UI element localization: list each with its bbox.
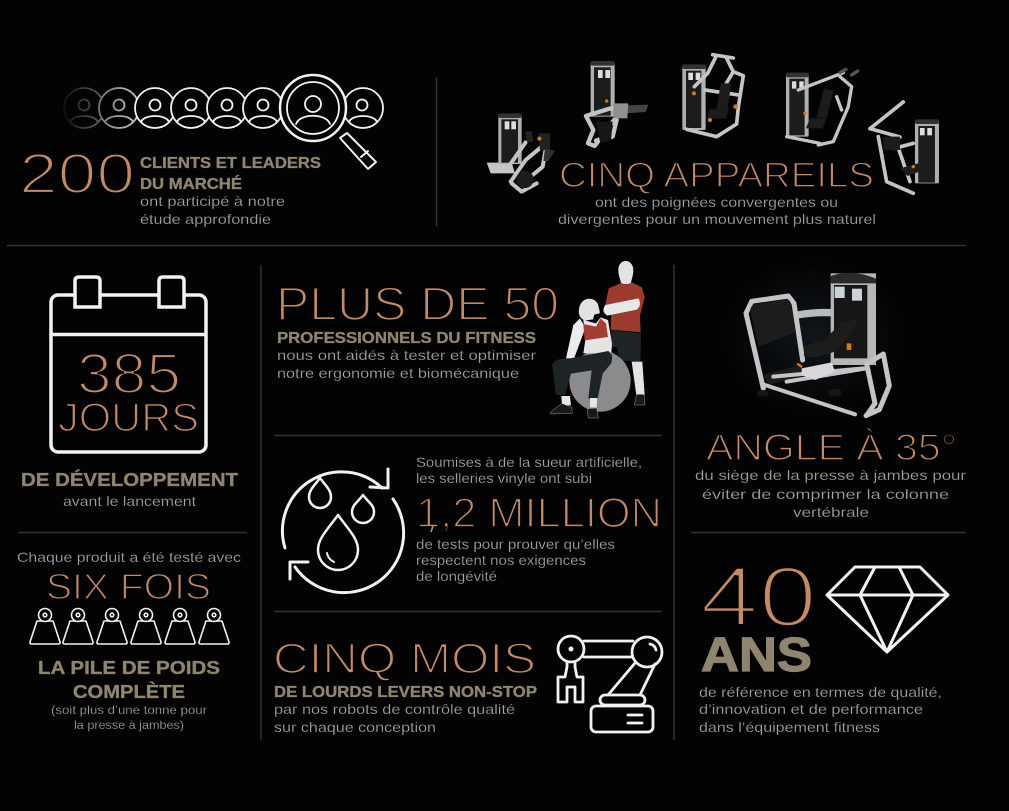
- machine 2: [586, 61, 648, 146]
- text: de tests: de tests pour prouver qu’elles: [416, 536, 615, 552]
- icon: calendar: [51, 277, 206, 452]
- text: soit plus: (soit plus d’une tonne pour: [51, 703, 207, 717]
- heading: six fois: SIX FOIS: [46, 566, 211, 607]
- panel: 385 jours: [21, 277, 239, 509]
- heading: 200: 200: [19, 142, 135, 206]
- text: longévité: de longévité: [416, 568, 497, 584]
- text: siège line 1: du siège de la presse à jambes pour: [695, 467, 966, 483]
- text: professionnels: PROFESSIONNELS DU FITNESS: [277, 330, 536, 347]
- text: respectent: respectent nos exigences: [416, 552, 586, 568]
- image: five machines: [487, 55, 939, 193]
- ball: [569, 350, 631, 412]
- text: soumises: Soumises à de la sueur artificielle,: [416, 454, 642, 470]
- text: sur chaque: sur chaque conception: [274, 719, 436, 735]
- machine 1: [487, 113, 555, 192]
- image: leg press machine: [723, 260, 903, 416]
- text: lourds levers: DE LOURDS LEVERS NON-STOP: [274, 684, 537, 701]
- machine 5: [870, 102, 939, 193]
- woman: [550, 299, 612, 418]
- text: ont participé: ont participé à notre: [140, 193, 285, 209]
- heading: cinq mois: CINQ MOIS: [273, 635, 536, 683]
- panel: cinq appareils: [487, 55, 939, 227]
- heading: jours: JOURS: [58, 396, 199, 440]
- text: poignées line 2: divergentes pour un mouvement plus naturel: [558, 211, 876, 227]
- text: de développement: DE DÉVELOPPEMENT: [21, 469, 239, 490]
- heading: 385: 385: [77, 342, 181, 406]
- heading: ans: ANS: [701, 629, 812, 682]
- image: two athletes with ball: [550, 261, 645, 418]
- text: par nos robots: par nos robots de contrôle qualité: [274, 701, 515, 717]
- panel: 40 ans: [699, 550, 948, 735]
- panel: angle 35: [695, 260, 966, 520]
- text: du marché: DU MARCHÉ: [140, 176, 242, 193]
- panel: cinq mois: [273, 635, 662, 735]
- text: siège line 3: vertébrale: [793, 504, 869, 520]
- icon: robot arm: [558, 636, 662, 732]
- icon: row of client avatars with magnifier: [64, 75, 383, 169]
- heading: angle à 35°: ANGLE À 35°: [706, 427, 957, 468]
- text: nous ont aidés: nous ont aidés à tester et optimiser: [277, 347, 536, 363]
- text: notre ergonomie: notre ergonomie et biomécanique: [277, 365, 519, 381]
- text: complète: COMPLÈTE: [73, 681, 185, 702]
- text: clients et leaders: CLIENTS ET LEADERS: [140, 155, 321, 172]
- text: étude approfondie: étude approfondie: [140, 211, 271, 227]
- panel: six fois: [17, 549, 241, 732]
- icon: diamond: [827, 567, 948, 652]
- panel: 200 clients: [19, 75, 383, 227]
- text: chaque produit: Chaque produit a été testé avec: [17, 549, 241, 565]
- icon: recycling arrows and sweat drops: [282, 469, 404, 593]
- text: avant le lancement: avant le lancement: [63, 493, 196, 509]
- panel: plus de 50: [276, 261, 645, 418]
- text: référence: de référence en termes de qualité,: [699, 684, 942, 700]
- icon: six weights: [30, 608, 229, 644]
- man: [603, 261, 645, 405]
- text: selleries: les selleries vinyle ont subi: [416, 470, 592, 486]
- machine 4: [786, 69, 858, 145]
- heading: cinq appareils: CINQ APPAREILS: [559, 156, 874, 195]
- heading: 40: 40: [700, 550, 817, 645]
- text: équipement: dans l’équipement fitness: [699, 719, 880, 735]
- heading: 1,2 million: 1,2 MILLION: [416, 489, 662, 536]
- heading: plus de 50: PLUS DE 50: [276, 277, 559, 330]
- machine 3: [682, 55, 743, 137]
- text: la pile de poids: LA PILE DE POIDS: [38, 657, 220, 678]
- text: innovation: d’innovation et de performance: [699, 701, 923, 717]
- text: la presse: la presse à jambes): [74, 718, 184, 732]
- panel: 1,2 million: [282, 454, 662, 593]
- text: siège line 2: éviter de comprimer la colonne: [702, 486, 949, 502]
- text: poignées line 1: ont des poignées convergentes ou: [595, 194, 838, 210]
